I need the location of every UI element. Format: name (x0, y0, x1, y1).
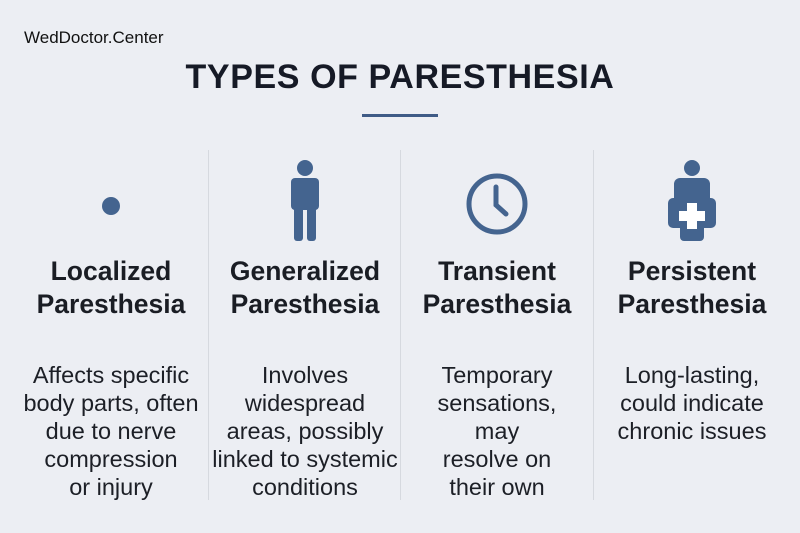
column: generalized: Involves (262, 362, 348, 388)
column: persistent: Paresthesia (618, 289, 766, 319)
column: localized: Affects specific (33, 362, 189, 388)
column: persistent: Long-lasting, (625, 362, 759, 388)
column: persistent: Persistent (628, 256, 756, 286)
column: generalized: Generalized (230, 256, 380, 286)
column: generalized: areas, possibly (227, 418, 383, 444)
column: localized: or injury (69, 474, 153, 500)
column: generalized (212, 256, 398, 500)
icon: person (291, 160, 319, 241)
column: transient: sensations, (438, 390, 556, 416)
column: transient: resolve on (443, 446, 551, 472)
column: localized (23, 256, 199, 500)
column: localized: compression (44, 446, 178, 472)
title: TYPES OF PARESTHESIA (186, 58, 614, 96)
column: generalized: conditions (252, 474, 358, 500)
icon: person with medical cross (668, 160, 716, 241)
column: transient (423, 256, 572, 500)
column: localized: body parts, often (23, 390, 199, 416)
column: localized: Localized (51, 256, 171, 286)
column: transient: Paresthesia (423, 289, 571, 319)
column: transient: Temporary (441, 362, 552, 388)
column: transient: may (475, 418, 519, 444)
column: localized: due to nerve (46, 418, 176, 444)
column: localized: Paresthesia (37, 289, 185, 319)
icon: clock (466, 174, 528, 234)
title underline (362, 114, 438, 117)
icon: dot (102, 197, 120, 215)
column: generalized: linked to systemic (212, 446, 398, 472)
column: persistent (618, 256, 767, 444)
column: generalized: widespread (245, 390, 365, 416)
column: transient: Transient (438, 256, 556, 286)
column: generalized: Paresthesia (231, 289, 379, 319)
brand label: WedDoctor.Center (24, 28, 164, 47)
column: transient: their own (449, 474, 545, 500)
column: persistent: could indicate (620, 390, 764, 416)
column: persistent: chronic issues (618, 418, 766, 444)
